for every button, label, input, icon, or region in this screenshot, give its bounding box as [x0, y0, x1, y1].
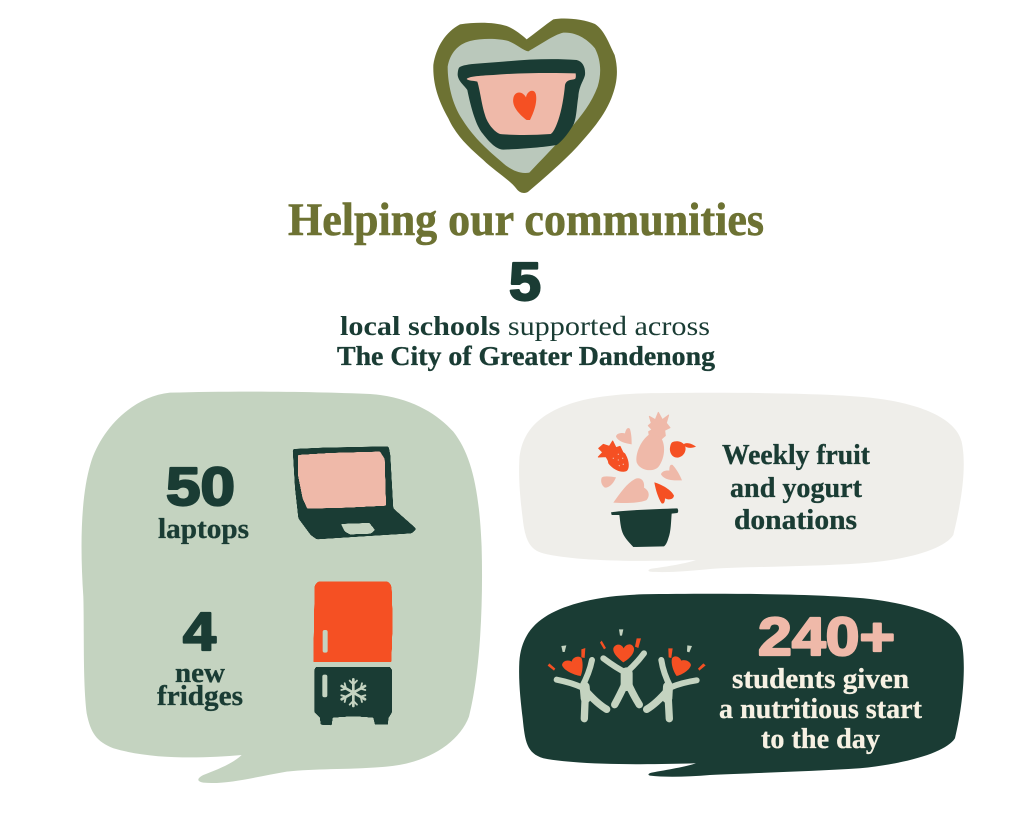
panel: fruit and yogurt: [519, 393, 964, 572]
icon: heart with bowl: [433, 18, 617, 193]
child left: [557, 660, 607, 719]
fruit and yogurt text: Weekly fruit: [722, 439, 870, 471]
statistic: 5 schools: [337, 252, 715, 371]
heart left: [562, 657, 583, 676]
city name: The City of Greater Dandenong: [337, 340, 715, 371]
laptops label: laptops: [158, 514, 249, 545]
students description: to the day: [761, 723, 880, 755]
panel: students: [519, 594, 964, 777]
icon: laptop: [293, 446, 417, 539]
speech bubble shape: [519, 393, 964, 572]
orange heart: [654, 482, 674, 504]
strawberry seeds: [613, 454, 624, 466]
students count: 240+: [758, 607, 895, 667]
number 5: 5: [509, 252, 541, 312]
icon: strawberry: [598, 441, 629, 472]
laptops count: 50: [166, 457, 235, 517]
apple leaf: [683, 443, 696, 448]
panel: laptops and fridges: [82, 392, 482, 783]
speech bubble shape: [519, 594, 964, 777]
icon: snowflake: [341, 679, 365, 706]
students description: students given: [732, 663, 909, 695]
fridges label: fridges: [157, 681, 243, 712]
icon: bowl: [611, 508, 678, 547]
icon: three children with hearts: [548, 629, 706, 719]
child right: [647, 660, 697, 719]
speech bubble shape: [82, 392, 482, 783]
heart centre: [613, 644, 634, 662]
icon: fridge: [313, 581, 393, 725]
fruit and yogurt text: donations: [734, 504, 857, 536]
icon: pineapple: [636, 412, 670, 470]
title: Helping our communities: [288, 194, 764, 246]
schools description: local schools supported across: [340, 310, 710, 341]
fruit and yogurt text: and yogurt: [730, 472, 862, 504]
child centre: [603, 653, 644, 705]
sparks: [548, 629, 706, 671]
icon: apple: [670, 441, 686, 458]
heart right: [672, 656, 691, 676]
fridges label: new: [175, 658, 225, 689]
fruit hearts: [601, 428, 682, 503]
icons: laptop and fridge: [293, 446, 417, 725]
students description: a nutritious start: [719, 693, 922, 725]
icon: fruit and bowl: [598, 412, 696, 547]
fridges count: 4: [183, 602, 216, 662]
